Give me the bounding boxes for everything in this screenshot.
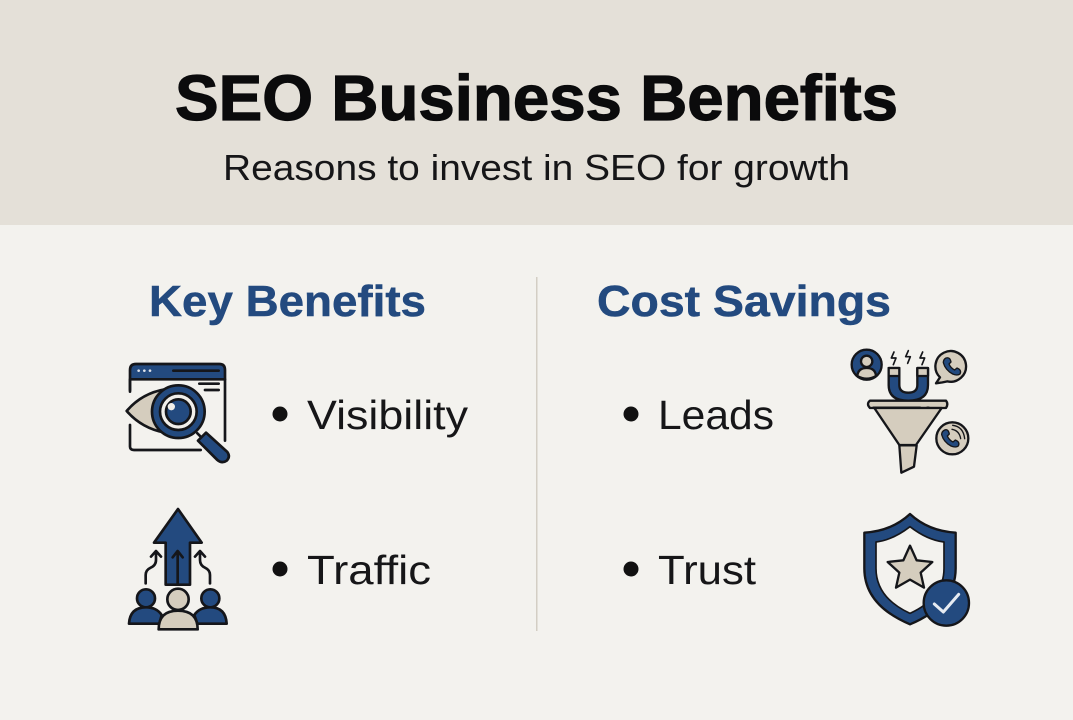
item: trust: Trust <box>658 547 757 593</box>
item: trust <box>624 547 757 593</box>
icon: shield with star and check badge <box>864 514 969 626</box>
item: visibility: Visibility <box>307 392 469 438</box>
heading: cost savings: Cost Savings <box>597 277 891 326</box>
item: leads: Leads <box>658 392 774 438</box>
icon: eye and magnifier on browser window <box>127 364 229 462</box>
item: traffic: Traffic <box>307 547 431 593</box>
title: SEO Business Benefits <box>175 62 898 134</box>
subtitle: Reasons to invest in SEO for growth <box>223 147 850 188</box>
heading: key benefits: Key Benefits <box>149 277 426 326</box>
icon: arrow up with people <box>129 509 227 629</box>
icon: funnel with magnet and contacts <box>852 350 968 473</box>
header band <box>0 0 1073 225</box>
